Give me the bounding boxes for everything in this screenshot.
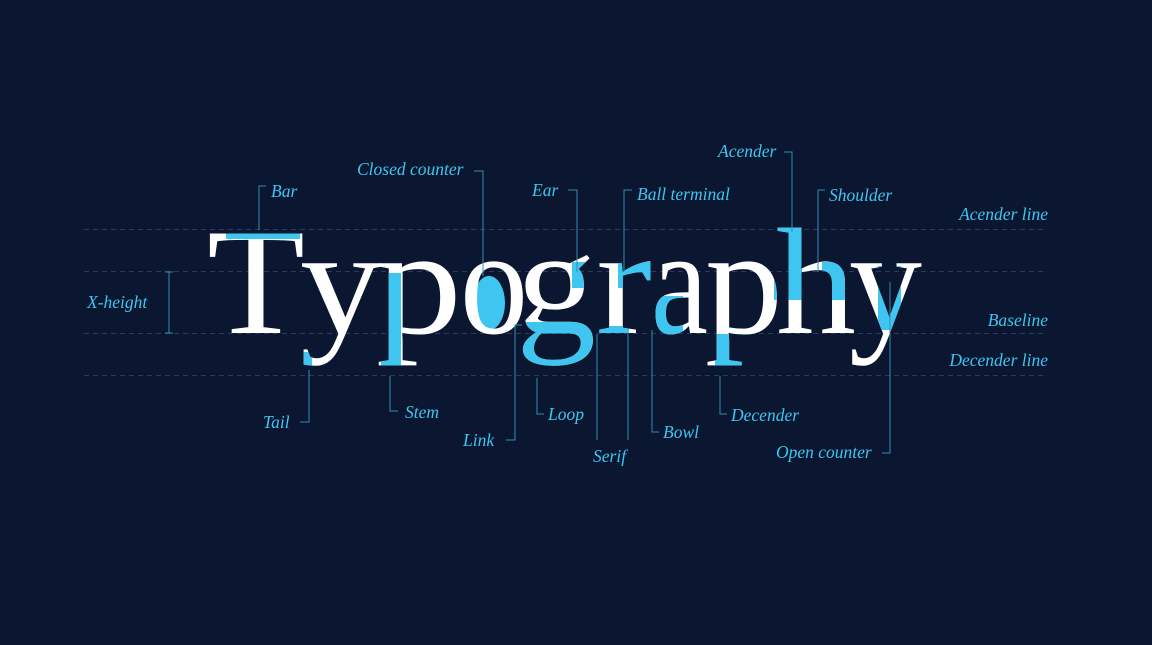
label: Serif <box>593 334 628 466</box>
title word: Typography: r <box>596 198 652 366</box>
title word: Typography: a <box>651 198 708 366</box>
label: Shoulder <box>818 185 892 272</box>
label: Loop <box>537 378 584 424</box>
label: Open counter: Open counter <box>776 442 872 462</box>
title word: Typography: y <box>300 198 382 366</box>
label: Ball terminal <box>624 184 730 272</box>
label: Bar <box>259 181 297 230</box>
title word: Typography: a <box>651 198 708 366</box>
label: Acender line: Acender line <box>958 204 1048 224</box>
icon: closed counter fill <box>473 276 505 330</box>
label: Ball terminal: Ball terminal <box>637 184 730 204</box>
label: Stem <box>390 376 439 422</box>
label: Baseline: Baseline <box>988 310 1048 330</box>
title word: Typography: p <box>705 198 783 366</box>
label: Bar: Bar <box>271 181 297 201</box>
title word: Typography: g <box>516 198 596 366</box>
title word: Typography: y <box>300 198 382 366</box>
label: Link: Link <box>462 430 495 450</box>
title word: Typography <box>210 228 922 366</box>
label: Serif: Serif <box>593 446 628 466</box>
label: Bowl <box>652 330 699 442</box>
label: Tail: Tail <box>263 412 290 432</box>
label: Link <box>462 325 522 450</box>
title word: Typography: p <box>376 198 462 366</box>
title word: Typography: h <box>776 198 856 366</box>
label: Stem: Stem <box>405 402 439 422</box>
label: Loop: Loop <box>547 404 584 424</box>
label: Shoulder: Shoulder <box>829 185 892 205</box>
label: Decender <box>720 376 799 425</box>
label: Acender <box>717 141 792 232</box>
label: Open counter <box>776 282 890 462</box>
title word: Typography: T <box>207 198 305 366</box>
title word: Typography: r <box>596 198 652 366</box>
title word: Typography: o <box>460 198 528 366</box>
label: Acender: Acender <box>717 141 776 161</box>
label: Decender line: Decender line <box>948 350 1048 370</box>
title word: Typography: y <box>849 198 922 366</box>
title word: Typography: T <box>207 198 305 366</box>
label: Decender: Decender <box>730 405 799 425</box>
title word: Typography: h <box>776 198 856 366</box>
title word: Typography: y <box>849 198 922 366</box>
label: Ear: Ear <box>531 180 558 200</box>
label: Closed counter <box>357 159 483 276</box>
title word: Typography: p <box>376 198 462 366</box>
label: Tail <box>263 370 309 432</box>
label: Closed counter: Closed counter <box>357 159 464 179</box>
label: Bowl: Bowl <box>663 422 699 442</box>
label: X-height: X-height <box>86 292 148 312</box>
title word: Typography: p <box>705 198 783 366</box>
label: X-height <box>86 272 173 333</box>
title word: Typography: g <box>516 198 596 366</box>
label: Ear <box>531 180 577 272</box>
